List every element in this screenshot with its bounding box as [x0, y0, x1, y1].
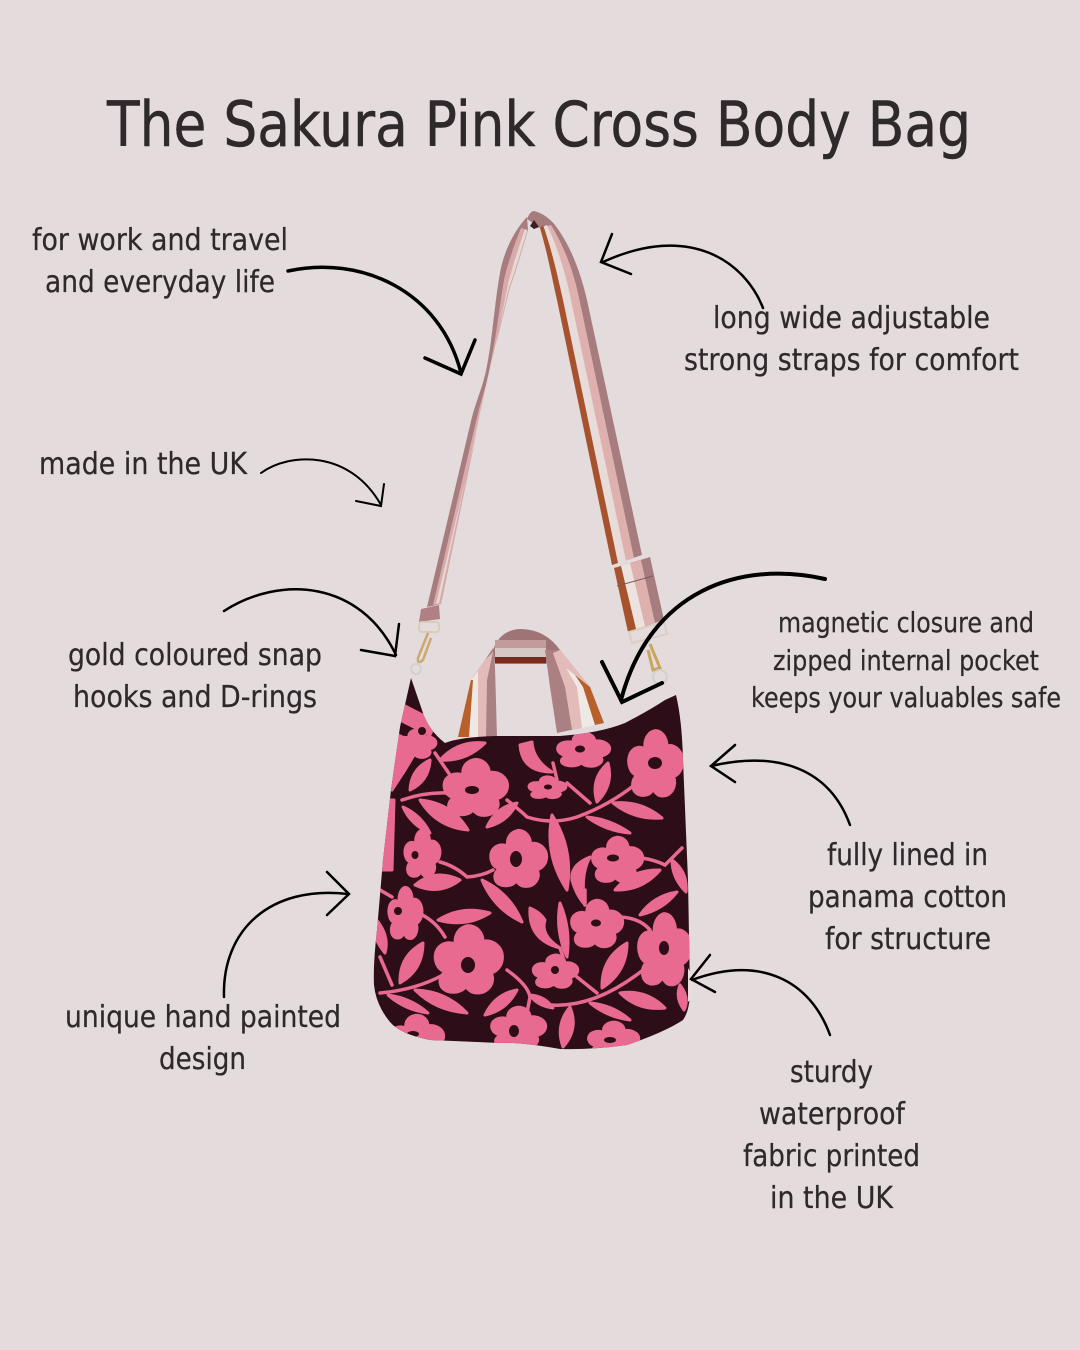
label: magnetic closure — [751, 606, 1061, 714]
label: sturdy fabric: sturdy — [790, 1055, 873, 1090]
stems — [380, 753, 682, 1013]
label: gold snap hooks — [68, 638, 322, 715]
label: sturdy fabric — [743, 1055, 920, 1216]
label: magnetic closure: zipped internal pocket — [773, 644, 1039, 677]
long strap: right side — [527, 211, 642, 565]
bag photo illustration — [365, 211, 700, 1061]
short handle: right leg — [545, 650, 604, 733]
arrow: fully lined — [711, 745, 850, 825]
label: long wide straps: long wide adjustable — [713, 301, 990, 336]
label: sturdy fabric: fabric printed — [743, 1139, 920, 1174]
label: for work and travel — [32, 223, 288, 300]
right D-ring and snap hook — [629, 622, 667, 684]
short handle: left leg — [458, 648, 497, 737]
long strap: left side — [427, 217, 528, 607]
label: fully lined: panama cotton — [808, 880, 1007, 915]
arrow: gold snap hooks — [224, 589, 399, 656]
label: for work and travel: for work and travel — [32, 223, 288, 258]
label: fully lined — [808, 838, 1007, 957]
label: gold snap hooks: gold coloured snap — [68, 638, 322, 673]
title: The Sakura Pink Cross Body Bag — [106, 88, 971, 161]
floral print — [374, 705, 691, 1061]
label: magnetic closure: magnetic closure and — [778, 606, 1034, 639]
arrow: to strap from work label — [288, 267, 475, 374]
label: long wide straps — [684, 301, 1019, 378]
arrow: to strap top — [601, 234, 763, 308]
label: gold snap hooks: hooks and D-rings — [73, 680, 317, 715]
arrow: made in the UK — [261, 459, 384, 506]
label: unique design: unique hand painted — [65, 1000, 341, 1035]
label: long wide straps: strong straps for comfort — [684, 343, 1019, 378]
left strap tab — [419, 605, 440, 622]
left D-ring and snap hook — [411, 622, 439, 674]
care label — [688, 968, 692, 1002]
short handle: back band — [493, 629, 560, 664]
bag body — [374, 678, 690, 1050]
arrow: magnetic closure — [602, 574, 825, 702]
arrow: unique design — [224, 872, 349, 997]
label: fully lined: fully lined in — [827, 838, 988, 873]
label: unique design: design — [159, 1042, 246, 1077]
label: made in the UK: made in the UK — [39, 447, 248, 482]
flower centres — [394, 727, 669, 1043]
label: unique design — [65, 1000, 341, 1077]
label: sturdy fabric: in the UK — [770, 1181, 894, 1216]
label: sturdy fabric: waterproof — [759, 1097, 906, 1132]
label: for work and travel: and everyday life — [45, 265, 275, 300]
label: fully lined: for structure — [825, 922, 991, 957]
arrow: sturdy fabric — [691, 955, 830, 1035]
strap buckle slider — [614, 557, 664, 632]
leaves — [440, 743, 485, 760]
